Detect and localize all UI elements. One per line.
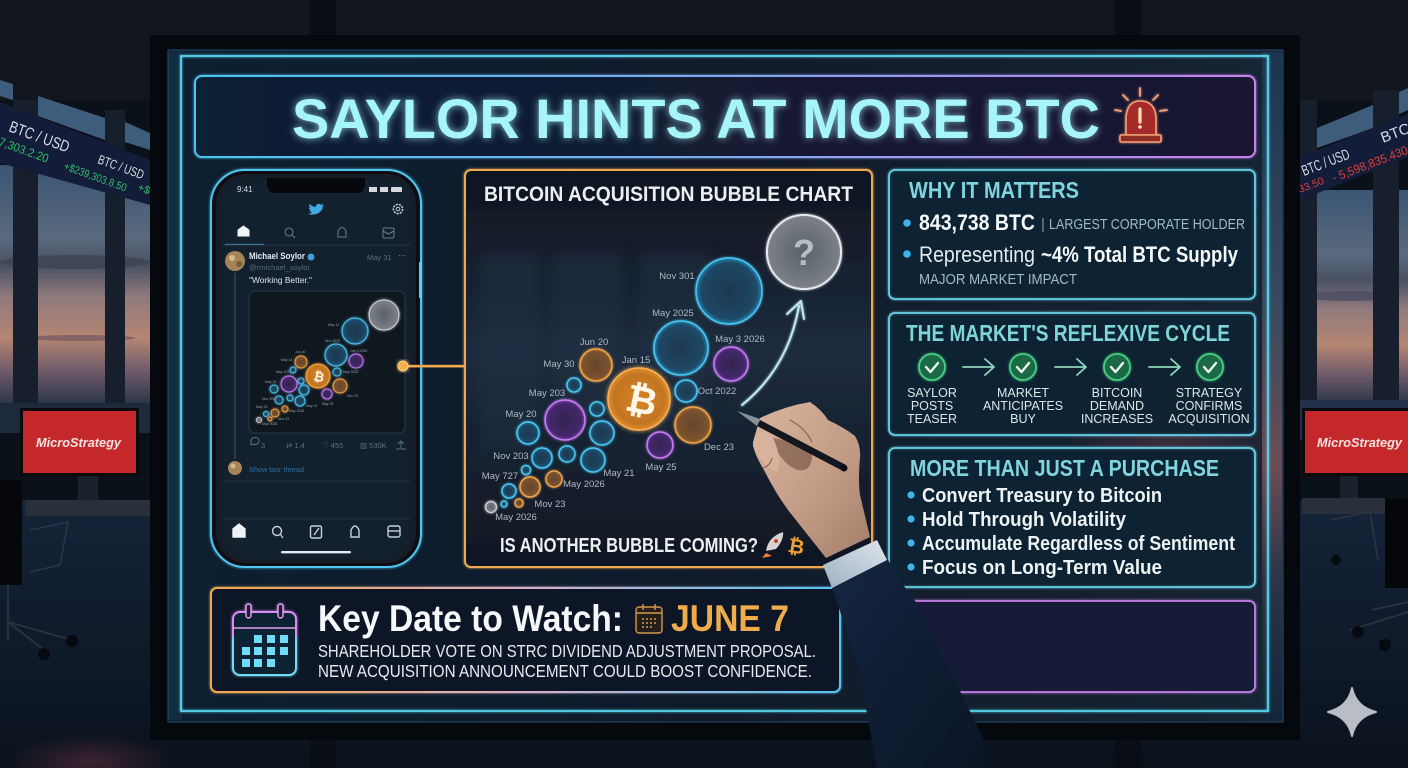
heading: Key Date to Watch: xyxy=(318,598,623,639)
chart caption: IS ANOTHER BUBBLE COMING? xyxy=(500,535,758,557)
panel: bitcoin acquisition bubble chart xyxy=(465,170,872,567)
phone home indicator xyxy=(281,551,351,553)
description: NEW ACQUISITION ANNOUNCEMENT COULD BOOST CONFIDENCE. xyxy=(318,661,812,681)
suit sleeve xyxy=(832,558,990,768)
tweet embedded bubble chart: May 203 xyxy=(276,370,289,374)
description: SHAREHOLDER VOTE ON STRC DIVIDEND ADJUSTMENT PROPOSAL. xyxy=(318,641,816,661)
tweet embedded bubble chart: Nov 23 xyxy=(278,417,289,421)
icon: calendar xyxy=(233,604,296,675)
check marks xyxy=(926,363,1216,372)
tweet action row: ♡ 455 xyxy=(322,441,343,450)
bullet list: Accumulate Regardless of Sentiment xyxy=(922,533,1235,555)
palm shadow xyxy=(772,438,812,470)
icon: rocket xyxy=(762,532,783,558)
tweet embedded bubble chart: May 25 xyxy=(322,402,334,406)
status bar xyxy=(237,185,402,194)
phone bottom navigation xyxy=(233,524,400,538)
bubble date labels: Mov 23 xyxy=(534,499,566,510)
stat: BTC held: 843,738 BTC xyxy=(919,210,1035,235)
bubble date labels: Dec 23 xyxy=(704,442,734,453)
bullet list xyxy=(907,485,1235,579)
connector: phone to chart xyxy=(398,361,466,371)
tweet header: May 31 xyxy=(367,253,392,262)
tweet embedded bubble chart: May 2026 xyxy=(289,409,304,413)
bubble date labels: May 21 xyxy=(603,468,635,479)
panel: key date to watch xyxy=(211,588,840,692)
bubble date labels: Oct 2022 xyxy=(698,386,736,397)
cycle step labels: INCREASES xyxy=(1081,412,1153,426)
office chairs xyxy=(0,480,1408,660)
question mark in mystery bubble: ? xyxy=(793,232,815,273)
display board frame xyxy=(150,35,1300,740)
thumb xyxy=(753,432,779,472)
cycle step labels: STRATEGY xyxy=(1176,386,1243,400)
ticker: left BTC/USD xyxy=(0,102,158,205)
tweet embedded bubble chart: Dec 23 xyxy=(347,394,358,398)
tweet embedded bubble chart: May 14 xyxy=(281,358,293,362)
bubble date labels: Nov 203 xyxy=(493,451,529,462)
cycle step labels: SAYLOR xyxy=(907,386,957,400)
ticker: left BTC/USD: +$239,303.8.50 xyxy=(62,161,128,194)
tweet action row: ⇄ 1.4 xyxy=(286,441,305,450)
tweet embedded bubble chart: May 11 xyxy=(328,323,339,327)
panel: the market's reflexive cycle xyxy=(889,313,1255,435)
left windows xyxy=(0,80,150,433)
stat: BTC held: LARGEST CORPORATE HOLDER xyxy=(1049,216,1245,233)
bullet list: Hold Through Volatility xyxy=(922,509,1127,531)
tweet embedded bubble chart: May 24 xyxy=(256,405,268,409)
bubble date labels: May 2026 xyxy=(495,512,537,523)
show thread link xyxy=(222,461,411,519)
tweet embedded bubble chart: May 2022 xyxy=(343,370,358,374)
bullet list: Convert Treasury to Bitcoin xyxy=(922,485,1162,507)
bubble date labels: May 3 2026 xyxy=(715,334,765,345)
stat: BTC held: | xyxy=(1041,216,1045,233)
hand xyxy=(753,402,870,558)
monitor: MicroStrategy right: MicroStrategy xyxy=(1317,435,1403,450)
chart title: BITCOIN ACQUISITION BUBBLE CHART xyxy=(484,183,853,206)
stat: BTC held xyxy=(903,210,1245,235)
status bar: 9:41 xyxy=(237,185,253,194)
panel: empty purple frame xyxy=(880,601,1255,692)
tweet header: @rmichael_soylor xyxy=(249,263,311,272)
tweet header: ··· xyxy=(398,251,406,260)
bubble date labels: May 30 xyxy=(543,359,575,370)
watermark: sparkle xyxy=(1328,688,1376,736)
heading: THE MARKET'S REFLEXIVE CYCLE xyxy=(906,320,1230,346)
arrow to next bubble xyxy=(742,301,804,405)
bubble date labels: Nov 301 xyxy=(659,271,695,282)
tweet embedded bubble chart: ₿ xyxy=(312,368,326,385)
ticker: right BTC/USD xyxy=(1297,114,1408,200)
tweet embedded bubble chart xyxy=(249,291,405,433)
cycle step labels: BITCOIN xyxy=(1092,386,1142,400)
bullet list: Focus on Long-Term Value xyxy=(922,557,1162,579)
stat: supply share: MAJOR MARKET IMPACT xyxy=(919,271,1077,288)
tweet embedded bubble chart: Jan 3 2026 xyxy=(350,349,367,353)
show thread link: Show tsor thread xyxy=(249,465,304,474)
key date: JUNE 7 xyxy=(671,598,789,639)
bubble date labels: May 25 xyxy=(645,462,677,473)
stat: supply share xyxy=(903,242,1239,288)
icon: bitcoin symbol: ₿ xyxy=(786,535,806,559)
bubble date labels: Jan 15 xyxy=(622,355,650,366)
stat: supply share: Representing xyxy=(919,242,1035,267)
cycle arrows xyxy=(963,359,1180,375)
tweet embedded bubble chart: Nov 2025 xyxy=(325,339,340,343)
stat: supply share: ~4% Total BTC Supply xyxy=(1041,242,1239,267)
heading: WHY IT MATTERS xyxy=(909,177,1079,203)
tweet embedded bubble chart: Jun 20 xyxy=(295,350,306,354)
board stand posts xyxy=(310,0,1141,768)
monitor: MicroStrategy left xyxy=(20,408,150,516)
monitor: MicroStrategy right xyxy=(1302,408,1408,514)
panel: more than just a purchase xyxy=(889,448,1255,587)
icon: mini calendar xyxy=(636,604,662,633)
tweet action row xyxy=(251,437,406,450)
hand holding stylus xyxy=(737,402,990,768)
bubble date labels: May 20 xyxy=(505,409,537,420)
cycle step labels: TEASER xyxy=(907,412,957,426)
tweet embedded bubble chart: May 21 xyxy=(306,404,318,408)
panel: why it matters xyxy=(889,170,1255,299)
phone notch xyxy=(267,178,365,193)
check icons xyxy=(919,354,1223,380)
tweet header xyxy=(225,251,406,459)
description xyxy=(318,641,816,681)
tab bar icons xyxy=(222,226,411,245)
title banner xyxy=(195,76,1255,157)
ticker: left BTC/USD: BTC / USD xyxy=(96,152,146,182)
bubble date labels: Jun 20 xyxy=(580,337,608,348)
bitcoin bubble xyxy=(608,368,670,430)
right windows xyxy=(1300,88,1408,440)
cycle step labels xyxy=(907,386,1250,426)
bubble date labels: May 727 xyxy=(482,471,518,482)
bitcoin bubble: ₿ xyxy=(622,378,661,425)
bubble date labels: May 203 xyxy=(529,388,565,399)
bubble date labels: May 2026 xyxy=(563,479,605,490)
phone mockup xyxy=(211,170,422,567)
shirt cuff xyxy=(823,540,887,588)
icon: settings gear xyxy=(393,204,403,214)
cycle step labels: MARKET xyxy=(997,386,1049,400)
tweet header: Michael Soylor xyxy=(249,251,305,261)
tweet action row: 3 xyxy=(261,441,265,450)
ticker: left BTC/USD: +$3 xyxy=(136,182,158,199)
stylus pen xyxy=(737,411,848,472)
tweet action row: ▥ 530K xyxy=(360,441,387,450)
icon: alarm siren xyxy=(1115,88,1167,142)
ticker: right BTC/USD: 33.50 xyxy=(1297,175,1326,196)
cycle step labels: DEMAND xyxy=(1090,399,1144,413)
finger shading xyxy=(763,420,812,468)
tweet embedded bubble chart: Nov 203 xyxy=(262,397,275,401)
ticker: left BTC/USD: BTC / USD xyxy=(7,119,72,156)
tweet header: "Working Better." xyxy=(249,275,312,285)
title: SAYLOR HINTS AT MORE BTC xyxy=(292,87,1100,150)
monitor: MicroStrategy left: MicroStrategy xyxy=(36,435,122,450)
bubble date labels xyxy=(482,271,765,523)
bubbles xyxy=(486,215,841,512)
cycle step labels: ACQUISITION xyxy=(1168,412,1250,426)
tweet embedded bubble chart: May 20 xyxy=(265,380,277,384)
cycle step labels: ANTICIPATES xyxy=(983,399,1063,413)
tweet embedded bubble chart: May 2026 xyxy=(262,422,277,426)
cycle step labels: BUY xyxy=(1010,412,1037,426)
heading: MORE THAN JUST A PURCHASE xyxy=(910,455,1219,481)
ticker: right BTC/USD: BTC / USD xyxy=(1299,146,1352,180)
cycle step labels: CONFIRMS xyxy=(1176,399,1242,413)
icon: twitter bird xyxy=(308,204,324,215)
bubble date labels: May 2025 xyxy=(652,308,694,319)
cycle step labels: POSTS xyxy=(911,399,953,413)
